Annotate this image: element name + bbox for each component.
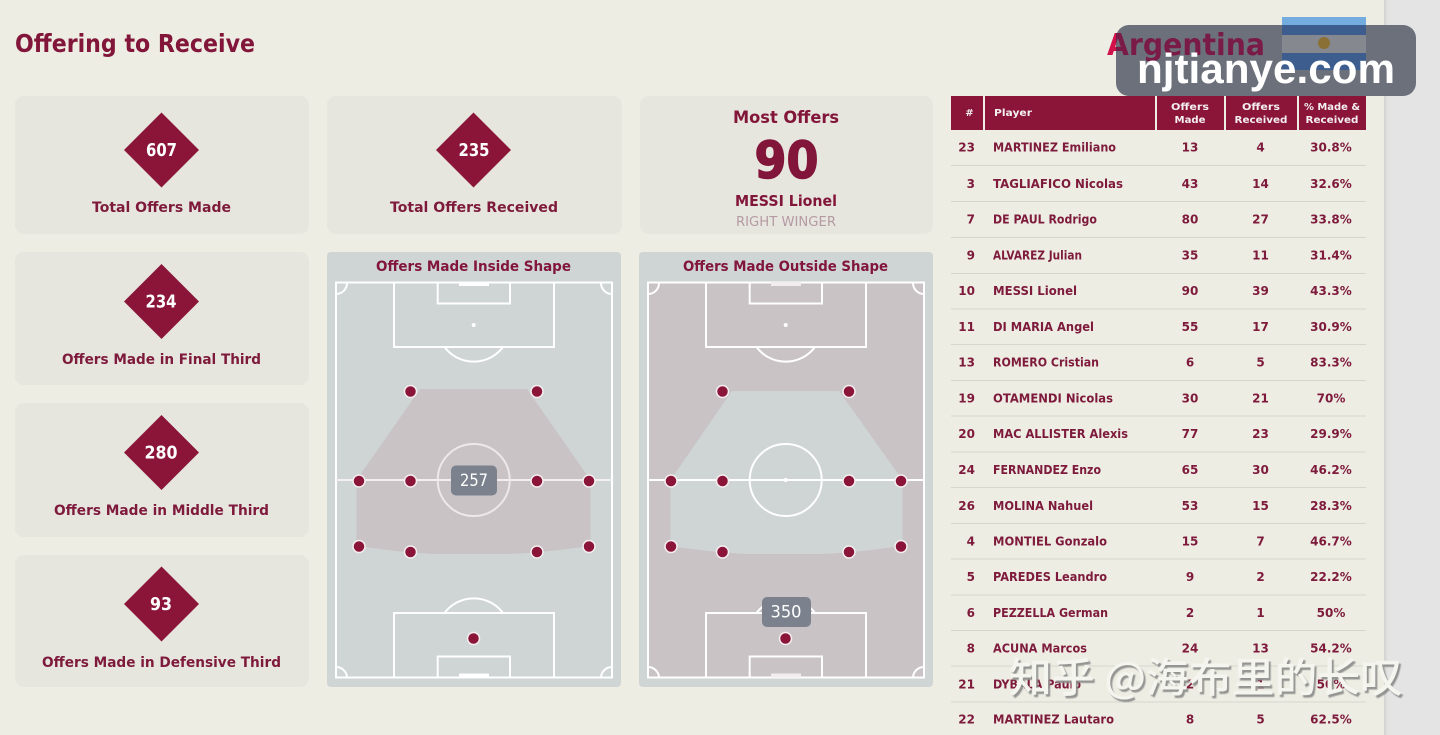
- row: ACUNA Marcos: 54.2%: [1310, 642, 1352, 656]
- table header: Received: [1306, 115, 1358, 126]
- row: MONTIEL Gonzalo: 15: [1182, 534, 1198, 548]
- row: MESSI Lionel: 10: [958, 284, 975, 298]
- row: PEZZELLA German: 6: [967, 606, 975, 620]
- row: ACUNA Marcos: [967, 642, 1352, 656]
- row: MARTINEZ Lautaro: 22: [958, 712, 975, 726]
- row: MAC ALLISTER Alexis: 23: [1252, 427, 1269, 441]
- row: TAGLIAFICO Nicolas: TAGLIAFICO Nicolas: [993, 177, 1123, 191]
- stat card: middle third: [15, 403, 309, 537]
- stat card: total offers made: 607: [146, 141, 177, 161]
- row: MARTINEZ Lautaro: 5: [1256, 712, 1265, 726]
- row separators: [951, 166, 1366, 702]
- player position dots: [665, 386, 907, 644]
- icon: Argentina flag: [1282, 17, 1366, 70]
- row: MARTINEZ Emiliano: 30.8%: [1310, 140, 1352, 154]
- row: ROMERO Cristian: [958, 356, 1352, 370]
- row: MESSI Lionel: 90: [1182, 284, 1198, 298]
- row: FERNANDEZ Enzo: 46.2%: [1310, 463, 1352, 477]
- table header: Offers: [1171, 102, 1209, 113]
- shaded area inside team shape: [356, 389, 590, 554]
- row: DYBALA Paulo: 21: [958, 678, 975, 692]
- stat card: defensive third: 93: [150, 595, 172, 615]
- stat card: total offers received: [327, 96, 622, 234]
- row: OTAMENDI Nicolas: 30: [1182, 392, 1198, 406]
- row: MESSI Lionel: 43.3%: [1310, 284, 1352, 298]
- row: MARTINEZ Emiliano: 13: [1182, 140, 1198, 154]
- row: MARTINEZ Lautaro: 62.5%: [1310, 712, 1352, 726]
- stat card: final third: Offers Made in Final Third: [62, 352, 261, 368]
- stat card: total offers received: 235: [458, 141, 490, 161]
- row: PEZZELLA German: 50%: [1317, 606, 1345, 620]
- row: MOLINA Nahuel: 15: [1252, 499, 1269, 513]
- row: PEZZELLA German: 1: [1256, 606, 1265, 620]
- row: TAGLIAFICO Nicolas: 32.6%: [1310, 177, 1352, 191]
- stat card: total offers made: [15, 96, 309, 234]
- row: MARTINEZ Lautaro: 8: [1186, 712, 1194, 726]
- row: MOLINA Nahuel: [958, 499, 1352, 513]
- row: DE PAUL Rodrigo: DE PAUL Rodrigo: [993, 212, 1097, 226]
- row: ALVAREZ Julian: 11: [1252, 248, 1269, 262]
- row: MOLINA Nahuel: 28.3%: [1310, 499, 1352, 513]
- row: PAREDES Leandro: [967, 570, 1352, 584]
- row: DYBALA Paulo: DYBALA Paulo: [993, 678, 1081, 692]
- row: TAGLIAFICO Nicolas: 43: [1182, 177, 1198, 191]
- row: MARTINEZ Emiliano: 23: [958, 140, 975, 154]
- row: DI MARIA Angel: 55: [1182, 320, 1198, 334]
- table header: Made: [1174, 115, 1206, 126]
- row: DYBALA Paulo: 1: [1256, 678, 1265, 692]
- country name: Argentina: Argentina: [1107, 28, 1265, 63]
- title: Offering to Receive: [15, 29, 255, 58]
- row: ACUNA Marcos: ACUNA Marcos: [993, 642, 1087, 656]
- row: FERNANDEZ Enzo: 30: [1252, 463, 1269, 477]
- row: MAC ALLISTER Alexis: 20: [958, 427, 975, 441]
- row: ROMERO Cristian: 83.3%: [1310, 356, 1352, 370]
- row: MONTIEL Gonzalo: [967, 534, 1352, 548]
- table header: Player: [994, 108, 1032, 119]
- row: MONTIEL Gonzalo: 4: [967, 534, 975, 548]
- panel: offers made inside shape: [327, 252, 621, 687]
- row: TAGLIAFICO Nicolas: [967, 177, 1352, 191]
- row: ACUNA Marcos: 13: [1252, 642, 1269, 656]
- row: ACUNA Marcos: 24: [1182, 642, 1198, 656]
- row: MONTIEL Gonzalo: 46.7%: [1310, 534, 1352, 548]
- row: FERNANDEZ Enzo: 65: [1182, 463, 1198, 477]
- heading: Offers Made Outside Shape: [683, 259, 888, 275]
- row: DI MARIA Angel: 17: [1252, 320, 1269, 334]
- row: MAC ALLISTER Alexis: [958, 427, 1352, 441]
- row: DE PAUL Rodrigo: 27: [1252, 212, 1269, 226]
- table header: Received: [1234, 115, 1288, 126]
- row: DE PAUL Rodrigo: [967, 212, 1352, 226]
- row: DI MARIA Angel: 30.9%: [1310, 320, 1352, 334]
- row: DYBALA Paulo: 50%: [1317, 678, 1345, 692]
- stat card: final third: [15, 252, 309, 385]
- row: OTAMENDI Nicolas: 70%: [1317, 392, 1345, 406]
- table header: Offers: [1242, 102, 1280, 113]
- stat card: total offers received: Total Offers Received: [390, 200, 558, 216]
- row: ALVAREZ Julian: ALVAREZ Julian: [993, 248, 1082, 262]
- row: FERNANDEZ Enzo: FERNANDEZ Enzo: [993, 463, 1101, 477]
- pitch lines: [648, 282, 924, 678]
- row: DE PAUL Rodrigo: 80: [1182, 212, 1198, 226]
- row: DI MARIA Angel: DI MARIA Angel: [993, 320, 1094, 334]
- row: DYBALA Paulo: [958, 678, 1345, 692]
- row: FERNANDEZ Enzo: 24: [958, 463, 975, 477]
- row: PAREDES Leandro: 5: [967, 570, 975, 584]
- row: MARTINEZ Emiliano: 4: [1256, 140, 1265, 154]
- row: MOLINA Nahuel: 26: [958, 499, 975, 513]
- stat card: middle third: Offers Made in Middle Third: [54, 503, 269, 519]
- row: PEZZELLA German: [967, 606, 1345, 620]
- cleared area inside team shape: [670, 391, 902, 554]
- row: ALVAREZ Julian: 31.4%: [1310, 248, 1352, 262]
- count badge: 350: 350: [770, 602, 802, 622]
- stat card: final third: 234: [146, 292, 176, 312]
- stat card: most offers: 90: [754, 132, 818, 191]
- watermark text: njtianye.com: njtianye.com: [1137, 45, 1395, 92]
- row: MARTINEZ Lautaro: [958, 712, 1352, 726]
- row: ALVAREZ Julian: 9: [967, 248, 975, 262]
- stat card: most offers: RIGHT WINGER: [736, 215, 836, 230]
- player position dots: [353, 386, 595, 644]
- table header: [951, 96, 1366, 130]
- row: OTAMENDI Nicolas: [958, 392, 1345, 406]
- row: PAREDES Leandro: 22.2%: [1310, 570, 1352, 584]
- row: MONTIEL Gonzalo: MONTIEL Gonzalo: [993, 534, 1107, 548]
- row: OTAMENDI Nicolas: OTAMENDI Nicolas: [993, 392, 1113, 406]
- row: MESSI Lionel: 39: [1252, 284, 1269, 298]
- table header: % Made &: [1304, 102, 1360, 113]
- count badge: 257: 257: [460, 471, 488, 491]
- pitch background outside team shape: [648, 282, 924, 678]
- row: MARTINEZ Lautaro: MARTINEZ Lautaro: [993, 712, 1114, 726]
- row: TAGLIAFICO Nicolas: 3: [967, 177, 975, 191]
- row: OTAMENDI Nicolas: 19: [958, 392, 975, 406]
- stat card: defensive third: [15, 555, 309, 687]
- row: DYBALA Paulo: 2: [1186, 678, 1194, 692]
- row: DE PAUL Rodrigo: 7: [967, 212, 975, 226]
- row: MARTINEZ Emiliano: MARTINEZ Emiliano: [993, 140, 1116, 154]
- stat card: middle third: 280: [144, 444, 178, 464]
- stat card: most offers: MESSI Lionel: [735, 192, 837, 210]
- row: MESSI Lionel: MESSI Lionel: [993, 284, 1077, 298]
- row: PAREDES Leandro: 9: [1186, 570, 1194, 584]
- row: ROMERO Cristian: 5: [1256, 356, 1265, 370]
- row: MAC ALLISTER Alexis: 77: [1182, 427, 1198, 441]
- row: MAC ALLISTER Alexis: 29.9%: [1310, 427, 1352, 441]
- stat card: most offers: [640, 96, 933, 234]
- row: ROMERO Cristian: 13: [958, 356, 975, 370]
- panel: offers made outside shape: [639, 252, 933, 687]
- count badge: 257: [451, 466, 497, 496]
- row: PEZZELLA German: 2: [1186, 606, 1194, 620]
- stat card: defensive third: Offers Made in Defensive Third: [42, 655, 281, 671]
- row: ROMERO Cristian: 6: [1186, 356, 1194, 370]
- player table: [951, 96, 1366, 726]
- stat card: total offers made: Total Offers Made: [92, 200, 231, 216]
- row: PEZZELLA German: PEZZELLA German: [993, 606, 1108, 620]
- row: FERNANDEZ Enzo: [958, 463, 1352, 477]
- row: MOLINA Nahuel: MOLINA Nahuel: [993, 499, 1093, 513]
- row: DE PAUL Rodrigo: 33.8%: [1310, 212, 1352, 226]
- pitch lines: [336, 282, 612, 678]
- row: ALVAREZ Julian: [967, 248, 1352, 262]
- stat card: most offers: Most Offers: [733, 108, 839, 128]
- row: MOLINA Nahuel: 53: [1182, 499, 1198, 513]
- row: OTAMENDI Nicolas: 21: [1252, 392, 1269, 406]
- row: TAGLIAFICO Nicolas: 14: [1252, 177, 1269, 191]
- row: MAC ALLISTER Alexis: MAC ALLISTER Alexis: [993, 427, 1128, 441]
- row: DI MARIA Angel: 11: [958, 320, 975, 334]
- row: DI MARIA Angel: [958, 320, 1352, 334]
- row: PAREDES Leandro: PAREDES Leandro: [993, 570, 1107, 584]
- row: MONTIEL Gonzalo: 7: [1256, 534, 1265, 548]
- count badge: 350: [762, 597, 811, 627]
- row: ALVAREZ Julian: 35: [1182, 248, 1198, 262]
- row: ACUNA Marcos: 8: [967, 642, 975, 656]
- watermark badge: [1116, 25, 1416, 96]
- watermark: zhihu author: 知乎 @海布里的长叹: [1009, 644, 1403, 704]
- row: MESSI Lionel: [958, 284, 1352, 298]
- row: PAREDES Leandro: 2: [1256, 570, 1265, 584]
- row: ROMERO Cristian: ROMERO Cristian: [993, 356, 1099, 370]
- row: MARTINEZ Emiliano: [958, 140, 1352, 154]
- table header: #: [965, 108, 974, 119]
- heading: Offers Made Inside Shape: [376, 259, 571, 275]
